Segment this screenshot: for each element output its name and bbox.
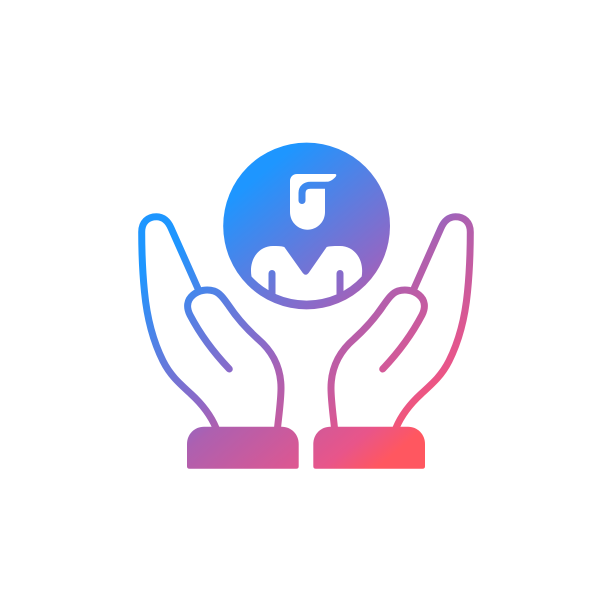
circle badge <box>223 143 390 309</box>
left hand finger outline <box>188 290 281 428</box>
icon: right hand <box>331 217 470 428</box>
person head <box>290 174 336 230</box>
right hand thumb and palm outline <box>396 217 470 428</box>
person shoulders <box>251 246 362 301</box>
left cuff <box>187 427 299 469</box>
right arm line <box>336 274 344 297</box>
left hand thumb and palm outline <box>142 217 216 428</box>
hair line <box>302 185 327 200</box>
icon: person in circle <box>223 143 390 309</box>
right hand finger outline <box>331 290 424 428</box>
right cuff <box>313 427 425 469</box>
icon: left hand <box>142 217 281 428</box>
left arm line <box>268 274 276 297</box>
